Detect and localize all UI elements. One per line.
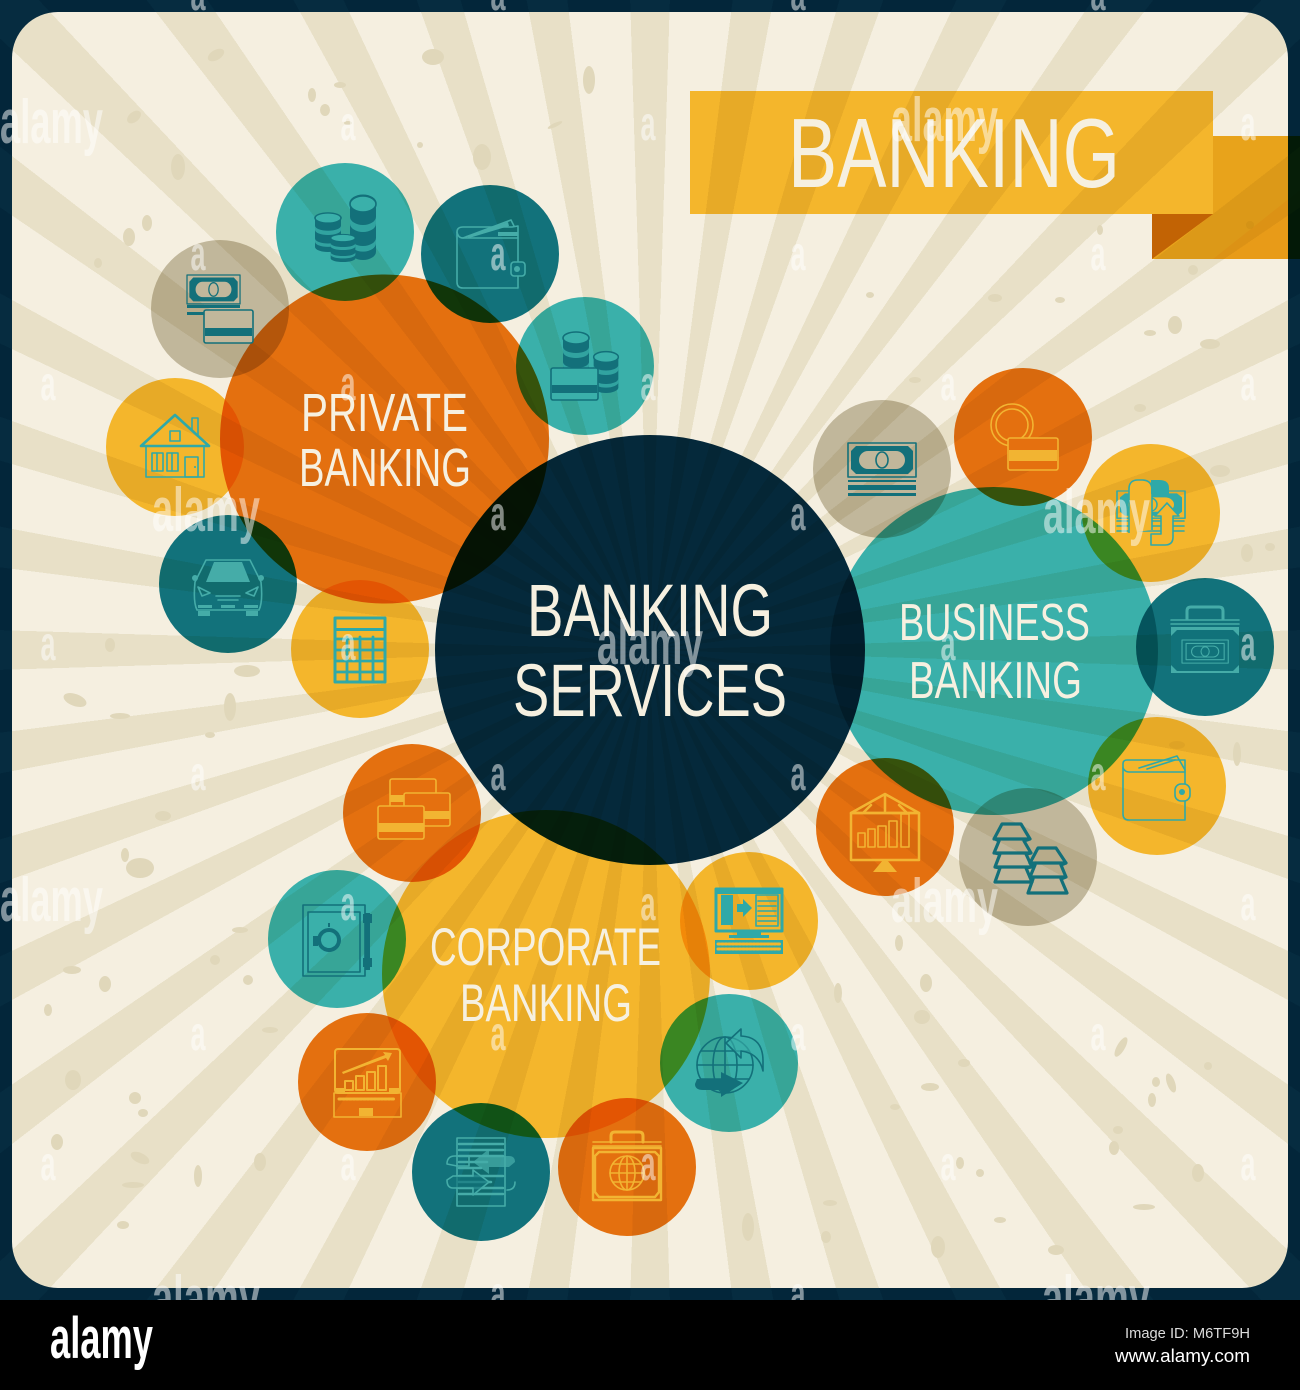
ribbon title banner — [690, 91, 1300, 259]
main circle: business banking — [830, 487, 1158, 815]
circle: calculator — [291, 580, 429, 718]
panel: central hub circle — [435, 435, 865, 865]
circle: gold bars — [959, 788, 1097, 926]
circle: cash and card — [151, 240, 289, 378]
panel: corporate banking — [268, 744, 818, 1241]
heading: corporate banking: BANKING — [460, 974, 632, 1033]
circle: computer — [680, 852, 818, 990]
heading: private banking: PRIVATE — [301, 383, 468, 443]
watermark overlay: alamy — [0, 866, 103, 935]
watermark overlay: alamy — [1042, 1264, 1150, 1333]
circle: briefcase — [1136, 578, 1274, 716]
watermark overlay: a — [340, 98, 356, 151]
heading: banking services — [513, 569, 787, 732]
heading: corporate banking — [430, 918, 661, 1033]
circle: stacked cards — [343, 744, 481, 882]
watermark overlay: alamy — [0, 88, 103, 157]
watermark overlay: a — [1090, 748, 1106, 801]
watermark overlay: a — [490, 228, 506, 281]
heading: banking services: BANKING — [527, 569, 773, 652]
heading: private banking — [299, 383, 471, 498]
circle: laptop chart — [298, 1013, 436, 1151]
watermark overlay: alamy — [597, 609, 703, 678]
watermark overlay: a — [190, 1008, 206, 1061]
circle: coins and card — [516, 297, 654, 435]
heading: business banking: BANKING — [909, 652, 1082, 710]
watermark overlay: a — [1090, 228, 1106, 281]
watermark overlay: a — [40, 1138, 56, 1191]
circle: coin stacks — [276, 163, 414, 301]
watermark overlay: a — [190, 228, 206, 281]
watermark overlay: a — [640, 1138, 656, 1191]
circle: wallet — [421, 185, 559, 323]
watermark overlay: a — [340, 358, 356, 411]
watermark overlay: a — [1240, 1138, 1256, 1191]
watermark overlay: a — [490, 1268, 506, 1321]
watermark overlay: a — [790, 1008, 806, 1061]
main circle: banking services — [435, 435, 865, 865]
circle: car — [159, 515, 297, 653]
watermark overlay: alamy — [891, 86, 998, 155]
watermark overlay: a — [40, 618, 56, 671]
watermark overlay: a — [790, 228, 806, 281]
footer url: www.alamy.com — [1114, 1346, 1250, 1366]
circle: safe — [268, 870, 406, 1008]
watermark overlay: a — [340, 1138, 356, 1191]
main circle: private banking — [220, 274, 549, 604]
circle: briefcase with globe — [558, 1098, 696, 1236]
watermark overlay: a — [640, 98, 656, 151]
watermark overlay: a — [1240, 878, 1256, 931]
circle: house — [106, 378, 244, 516]
watermark overlay: a — [490, 1008, 506, 1061]
watermark overlay: a — [790, 1268, 806, 1321]
heading: banking services: SERVICES — [513, 649, 787, 732]
heading: corporate banking: CORPORATE — [430, 918, 661, 977]
circle: globe with arrows — [660, 994, 798, 1132]
watermark overlay: a — [490, 748, 506, 801]
watermark overlay: a — [340, 878, 356, 931]
heading: business banking: BUSINESS — [899, 594, 1090, 652]
circle: presentation board — [816, 758, 954, 896]
watermark overlay: a — [340, 618, 356, 671]
watermark overlay: alamy — [1043, 478, 1150, 547]
watermark overlay: a — [1240, 358, 1256, 411]
watermark overlay: a — [640, 358, 656, 411]
title text: BANKING — [788, 98, 1120, 208]
footer image id: Image ID: M6TF9H — [1125, 1325, 1250, 1342]
circle: money transfer — [1082, 444, 1220, 582]
ribbon front — [690, 91, 1213, 214]
circle: wallet with cash — [1088, 717, 1226, 855]
panel: business banking — [813, 368, 1274, 926]
watermark overlay: alamy — [891, 867, 998, 936]
watermark overlay: a — [1240, 618, 1256, 671]
watermark overlay: a — [790, 488, 806, 541]
watermark overlay: alamy — [152, 1264, 260, 1333]
circle: coin and card — [954, 368, 1092, 506]
watermark overlay: a — [640, 878, 656, 931]
watermark overlay: a — [940, 618, 956, 671]
circle: banknote pile — [813, 400, 951, 538]
watermark overlay: a — [490, 488, 506, 541]
watermark overlay: a — [1240, 98, 1256, 151]
watermark overlay: a — [40, 358, 56, 411]
footer bar — [0, 1300, 1300, 1390]
watermark overlay: a — [940, 358, 956, 411]
watermark overlay: a — [1090, 1008, 1106, 1061]
ribbon tail — [1152, 136, 1300, 259]
watermark overlay: alamy — [152, 476, 260, 545]
watermark overlay: a — [790, 748, 806, 801]
heading: business banking — [899, 594, 1090, 710]
footer logo: alamy — [50, 1306, 153, 1371]
watermark overlay: a — [940, 1138, 956, 1191]
circle: document exchange — [412, 1103, 550, 1241]
panel: private banking — [106, 163, 654, 718]
watermark overlay: a — [190, 748, 206, 801]
heading: private banking: BANKING — [299, 438, 471, 498]
main circle: corporate banking — [382, 810, 710, 1138]
